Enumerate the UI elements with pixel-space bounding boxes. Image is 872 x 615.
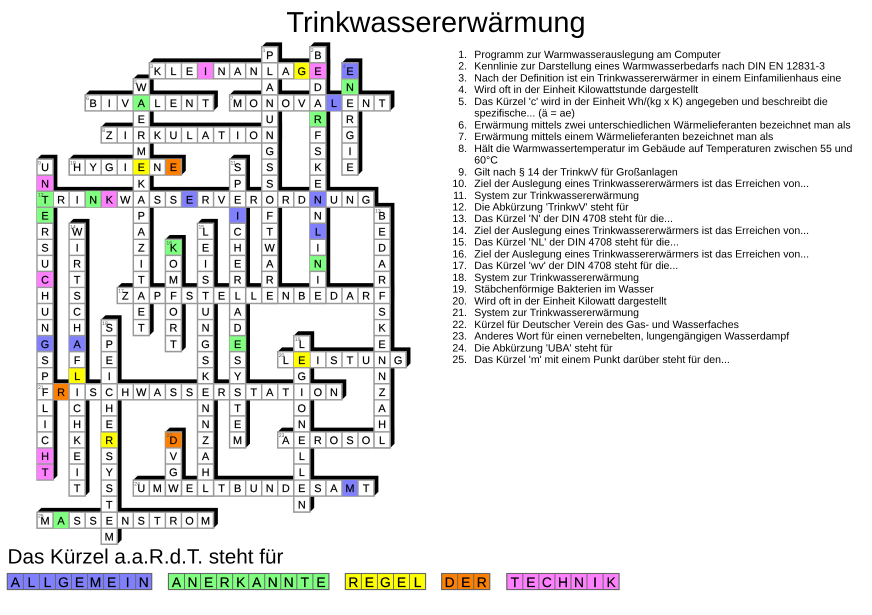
word 1 down: PLANUNGSSOFTWARE (262, 47, 278, 303)
clue numbers: 11 (231, 160, 236, 166)
word 16 down: KOMFORT: KOMFORT (169, 243, 179, 351)
clue 13: 13. (452, 213, 467, 225)
clue numbers: 7 (231, 95, 234, 102)
word shadows (37, 42, 410, 544)
word 9 down: UNTERSUCHUNGSPFLICHT: UNTERSUCHUNGSPFLICHT (41, 163, 49, 479)
clue numbers: 23 (279, 432, 285, 439)
clue 14: 14. (452, 225, 467, 237)
clue 6: 6. (458, 119, 467, 131)
word 4 down: ENERGIE (342, 63, 358, 175)
clue numbers: 18 (102, 320, 108, 326)
clue 18: System zur Trinkwassererwärmung (474, 272, 639, 284)
clue numbers: 13 (375, 208, 381, 214)
crossword puzzle (37, 42, 410, 544)
clue numbers: 6 (86, 95, 89, 102)
word 14 down: WIRTSCHAFLICHKEIT: WIRTSCHAFLICHKEIT (72, 227, 83, 495)
clue 21: 21. (452, 307, 467, 319)
clue numbers: 5 (134, 79, 137, 86)
solution: REGEL: REGEL (348, 574, 422, 590)
clue 22: 22. (452, 319, 467, 331)
word 17 across: ZAPFSTELLENBEDARF: ZAPFSTELLENBEDARF (122, 292, 385, 303)
word 17 across: ZAPFSTELLENBEDARF (117, 287, 390, 304)
clue 22: Kürzel für Deutscher Verein des Gas- und Wasserfaches (474, 319, 739, 331)
clue 9: 9. (458, 166, 467, 178)
clue 24: 24. (452, 342, 467, 354)
clue 3: Nach der Definition ist ein Trinkwassererwärmer in einem Einfamilienhaus eine (474, 72, 841, 84)
clue 20: 20. (452, 295, 467, 307)
word 2 down: BEDARFSKENNLINIE (310, 47, 326, 303)
word 15 down: LEISTUNGSKENNZAHL (198, 223, 214, 496)
clue numbers: 2 (311, 47, 314, 54)
clue 7: Erwärmung mittels einem Wärmelieferanten bezeichnet man als (474, 131, 773, 143)
clue 14: Ziel der Auslegung eines Trinkwassererwärmers ist das Erreichen von... (474, 225, 809, 237)
clue numbers: 12 (38, 192, 44, 198)
clue 19: Stäbchenförmige Bakterien im Wasser (474, 284, 654, 296)
word 5 down: WAERMEKAPAZITAET (133, 79, 149, 336)
clue 20: Wird oft in der Einheit Kilowatt dargestellt (474, 295, 667, 307)
word 12 across: TRINKWASSERVERORDNUNG: TRINKWASSERVERORDNUNG (42, 195, 370, 207)
word 10 across: HYGIENE (69, 159, 181, 175)
clue numbers: 1 (263, 47, 266, 54)
word 3 across: KLEINANLAGE: KLEINANLAGE (154, 67, 322, 78)
word 6 across: BIVALENT (85, 95, 214, 111)
clue 21: System zur Trinkwassererwärmung (474, 307, 639, 319)
clue numbers: 25 (38, 513, 44, 519)
clue 16: 16. (452, 248, 467, 260)
solution heading: Das Kürzel a.a.R.d.T. steht für (8, 546, 284, 568)
clue 17: 17. (452, 260, 467, 272)
clue 15: Das Kürzel 'NL' der DIN 4708 steht für die... (474, 237, 679, 249)
clue numbers: 20 (279, 352, 285, 359)
clue 25: 25. (452, 354, 467, 366)
word 19 down: LEGIONELLEN: LEGIONELLEN (298, 340, 306, 512)
word 23 across: AEROSOL: AEROSOL (282, 436, 385, 447)
clue 24: Die Abkürzung 'UBA' steht für (474, 342, 613, 354)
clue 6: Erwärmung mittels zwei unterschiedlichen Wärmelieferanten bezeichnet man als (474, 119, 851, 131)
clue 19: 19. (452, 284, 467, 296)
clue 12: Die Abkürzung 'TrinkwV' steht für (474, 202, 629, 214)
clue 5: 5. (458, 96, 467, 108)
word 16 down: KOMFORT (165, 239, 181, 352)
clue numbers: 10 (70, 160, 76, 166)
word 22 down: DVGW: DVGW (168, 436, 180, 495)
clue numbers: 16 (166, 240, 172, 246)
clue 13: Das Kürzel 'N' der DIN 4708 steht für die... (474, 213, 673, 225)
word 24 across: UMWELTBUNDESAMT: UMWELTBUNDESAMT (137, 484, 369, 495)
word 13 down: BEDARFSKENNZAHL: BEDARFSKENNZAHL (378, 211, 386, 447)
clue 23: 23. (452, 330, 467, 342)
word 9 down: UNTERSUCHUNGSPFLICHT (37, 159, 53, 480)
clue numbers: 8 (102, 127, 105, 134)
clue 12: 12. (452, 202, 467, 214)
word 23 across: AEROSOL (278, 432, 390, 448)
clue 5: Das Kürzel 'c' wird in der Einheit Wh/(kg x K) angegeben und beschreibt die (474, 96, 828, 108)
clue numbers: 19 (295, 336, 301, 343)
word 19 down: LEGIONELLEN (294, 336, 310, 512)
word 25 across: MASSENSTROM: MASSENSTROM (40, 516, 211, 528)
clue 15: 15. (452, 237, 467, 249)
solution: TECHNIK: TECHNIK (511, 574, 616, 590)
clue 11: 11. (453, 190, 467, 202)
word 21 across: FRISCHWASSERSTATION: FRISCHWASSERSTATION (42, 388, 338, 399)
clue 8: 8. (458, 143, 467, 155)
word 1 down: PLANUNGSSOFTWARE: PLANUNGSSOFTWARE (265, 51, 276, 303)
clue numbers: 22 (166, 432, 172, 439)
clue numbers: 3 (150, 63, 154, 70)
word 11 down: SPEICHERLADESYSTEM: SPEICHERLADESYSTEM (233, 163, 243, 447)
clue 10: Ziel der Auslegung eines Trinkwassererwärmers ist das Erreichen von... (474, 178, 809, 190)
clue 17: Das Kürzel 'wv' der DIN 4708 steht für die... (474, 260, 678, 272)
clue 1: Programm zur Warmwasserauslegung am Computer (474, 49, 721, 61)
word 22 down: DVGW (165, 432, 181, 496)
word 4 down: ENERGIE: ENERGIE (346, 67, 354, 174)
word 20 across: LEISTUNG (278, 352, 406, 368)
clue 8: Hält die Warmwassertemperatur im Gebäude auf Temperaturen zwischen 55 und (474, 143, 853, 155)
word 12 across: TRINKWASSERVERORDNUNG (37, 191, 374, 207)
word 20 across: LEISTUNG: LEISTUNG (283, 356, 402, 367)
clue numbers: 15 (198, 224, 205, 230)
word 24 across: UMWELTBUNDESAMT (133, 480, 374, 496)
title: Trinkwassererwärmung (286, 7, 586, 39)
word 11 down: SPEICHERLADESYSTEM (230, 159, 246, 448)
word 18 down: SPEICHERSYSTEM: SPEICHERSYSTEM (105, 324, 114, 544)
clue 2: Kennlinie zur Darstellung eines Warmwasserbedarfs nach DIN EN 12831-3 (474, 61, 825, 73)
word 5 down: WAERMEKAPAZITAET: WAERMEKAPAZITAET (136, 83, 147, 335)
word 3 across: KLEINANLAGE (149, 63, 326, 79)
word 15 down: LEISTUNGSKENNZAHL: LEISTUNGSKENNZAHL (201, 227, 210, 495)
word 8 across: ZIRKULATION: ZIRKULATION (106, 131, 274, 142)
clue list (452, 49, 853, 366)
solution: DER: DER (445, 574, 487, 590)
clue 16: Ziel der Auslegung eines Trinkwassererwärmers ist das Erreichen von... (474, 248, 809, 260)
clue 2: 2. (458, 61, 467, 73)
word 7 across: MONOVALENT: MONOVALENT (233, 99, 385, 110)
solution: ALLGEMEIN: ALLGEMEIN (11, 574, 149, 590)
clue 9: Gilt nach § 14 der TrinkwV für Großanlagen (474, 166, 678, 178)
clue numbers (38, 47, 381, 519)
clue 25: Das Kürzel 'm' mit einem Punkt darüber steht für den... (474, 354, 730, 366)
word 14 down: WIRTSCHAFLICHKEIT (69, 223, 85, 496)
clue 18: 18. (452, 272, 467, 284)
word 8 across: ZIRKULATION (101, 127, 278, 143)
clue 10: 10. (452, 178, 467, 190)
clue 23: Anderes Wort für einen vernebelten, lungengängigen Wasserdampf (474, 330, 789, 342)
word 21 across: FRISCHWASSERSTATION (37, 384, 342, 400)
clue numbers: 17 (118, 288, 124, 294)
clue 1: 1. (458, 49, 467, 61)
word 25 across: MASSENSTROM (37, 512, 214, 528)
clue 11: System zur Trinkwassererwärmung (474, 190, 639, 202)
clue 4: Wird oft in der Einheit Kilowattstunde dargestellt (474, 84, 698, 96)
word 7 across: MONOVALENT (230, 95, 390, 111)
word 10 across: HYGIENE: HYGIENE (73, 163, 178, 174)
clue 8: 60°C (474, 155, 498, 167)
word 2 down: BEDARFSKENNLINIE: BEDARFSKENNLINIE (314, 51, 322, 303)
solution: ANERKANNTE: ANERKANNTE (172, 574, 326, 590)
clue 3: 3. (458, 72, 467, 84)
clue numbers: 21 (38, 384, 44, 391)
solution words (7, 574, 619, 590)
clue 7: 7. (458, 131, 467, 143)
clue numbers: 4 (343, 63, 346, 70)
word 6 across: BIVALENT: BIVALENT (90, 99, 209, 110)
clue 4: 4. (458, 84, 467, 96)
clue numbers: 24 (134, 481, 140, 487)
word 18 down: SPEICHERSYSTEM (101, 320, 117, 544)
clue 5: spezifische... (ä = ae) (474, 108, 575, 120)
clue numbers: 14 (70, 224, 76, 230)
word 13 down: BEDARFSKENNZAHL (374, 207, 390, 448)
clue numbers: 9 (38, 160, 41, 166)
